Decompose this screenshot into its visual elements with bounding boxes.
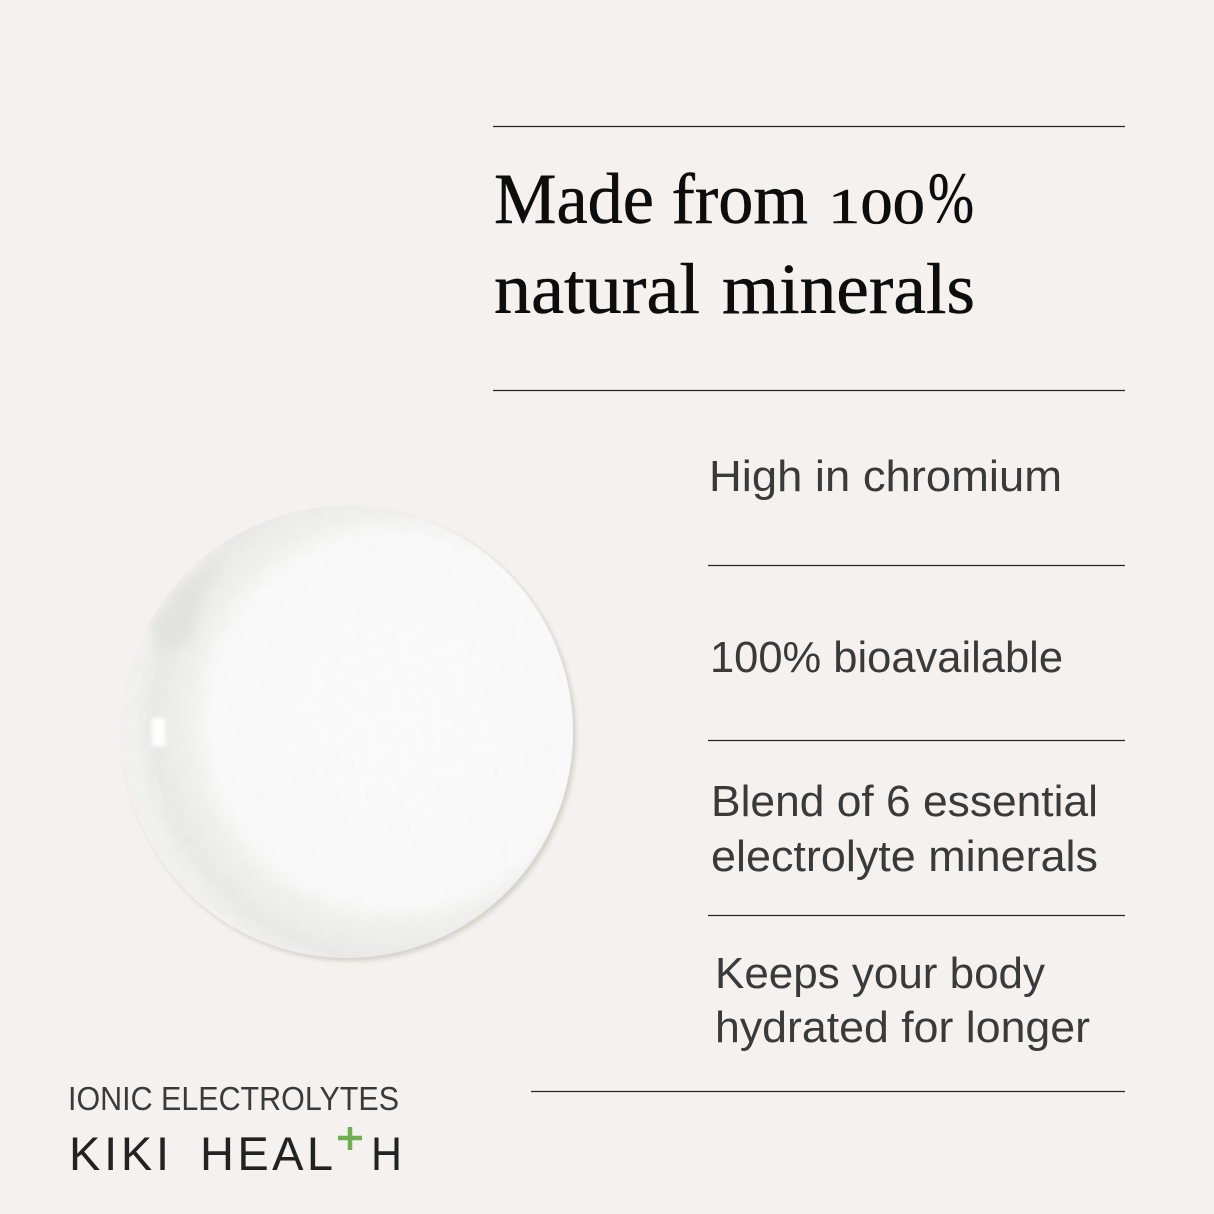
icon: green plus <box>338 1127 362 1150</box>
feature: keeps your body hydrated <box>715 949 1090 1052</box>
logo: Kiki Health: KIKI <box>69 1127 169 1180</box>
feature: blend of 6 essential electrolyte minerals <box>711 777 1098 881</box>
title: Made from <box>494 159 808 239</box>
feature: blend of 6 essential electrolyte minerals: electrolyte minerals <box>711 832 1098 881</box>
logo: Kiki Health: H <box>371 1127 402 1180</box>
feature: keeps your body hydrated: Keeps your body <box>715 949 1045 998</box>
title: minerals <box>722 249 975 329</box>
feature: 100% bioavailable: 100% bioavailable <box>710 633 1063 682</box>
powder dish image <box>121 506 576 961</box>
logo: Kiki Health <box>69 1127 402 1180</box>
feature: high in chromium: High in chromium <box>709 452 1062 501</box>
title <box>494 158 975 329</box>
feature: blend of 6 essential electrolyte minerals: Blend of 6 essential <box>711 777 1098 826</box>
feature: keeps your body hydrated: hydrated for longer <box>715 1003 1090 1052</box>
title: 100 <box>828 178 925 234</box>
logo: Kiki Health: HEAL <box>200 1127 333 1180</box>
title: % <box>928 158 974 238</box>
title: natural <box>494 249 700 329</box>
product name: IONIC ELECTROLYTES <box>68 1080 399 1117</box>
